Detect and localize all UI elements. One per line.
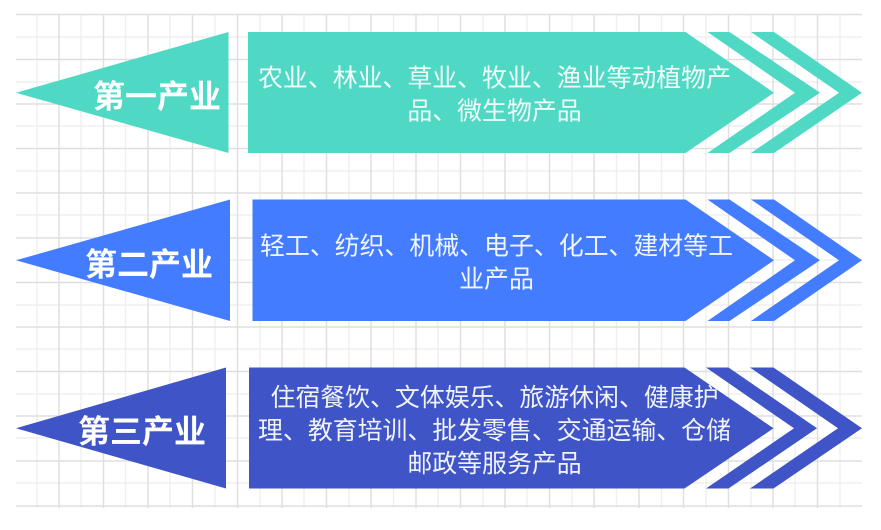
icon: secondary industry chevrons [708, 200, 862, 321]
text: tertiary industry products: 住宿餐饮、文体娱乐、旅游休闲、健康护 [270, 384, 719, 412]
icon: tertiary industry chevrons [706, 368, 862, 488]
panel: primary industry arrow body [248, 32, 774, 153]
icon: left triangle, tertiary industry [16, 368, 226, 488]
panel: tertiary industry [16, 368, 862, 488]
heading: primary industry: 第一产业 [93, 78, 221, 114]
text: secondary industry products: 业产品 [459, 266, 534, 294]
text: tertiary industry products: 邮政等服务产品 [407, 450, 582, 478]
text: secondary industry products: 轻工、纺织、机械、电子、化工、建材等工 [260, 232, 733, 260]
text: tertiary industry products: 理、教育培训、批发零售、交通运输、仓储 [258, 417, 731, 445]
text: primary industry products: 农业、林业、草业、牧业、渔业等动植物产 [258, 64, 731, 92]
panel: tertiary industry arrow body [249, 368, 774, 488]
panel: secondary industry [16, 200, 862, 321]
icon: left triangle, secondary industry [16, 200, 230, 321]
panel: primary industry [16, 32, 862, 153]
panel: secondary industry arrow body [252, 200, 774, 321]
heading: tertiary industry: 第三产业 [78, 414, 206, 450]
icon: left triangle, primary industry [16, 32, 228, 153]
text: primary industry products: 品、微生物产品 [407, 98, 582, 126]
heading: secondary industry: 第二产业 [85, 246, 213, 282]
icon: primary industry chevrons [708, 32, 862, 153]
